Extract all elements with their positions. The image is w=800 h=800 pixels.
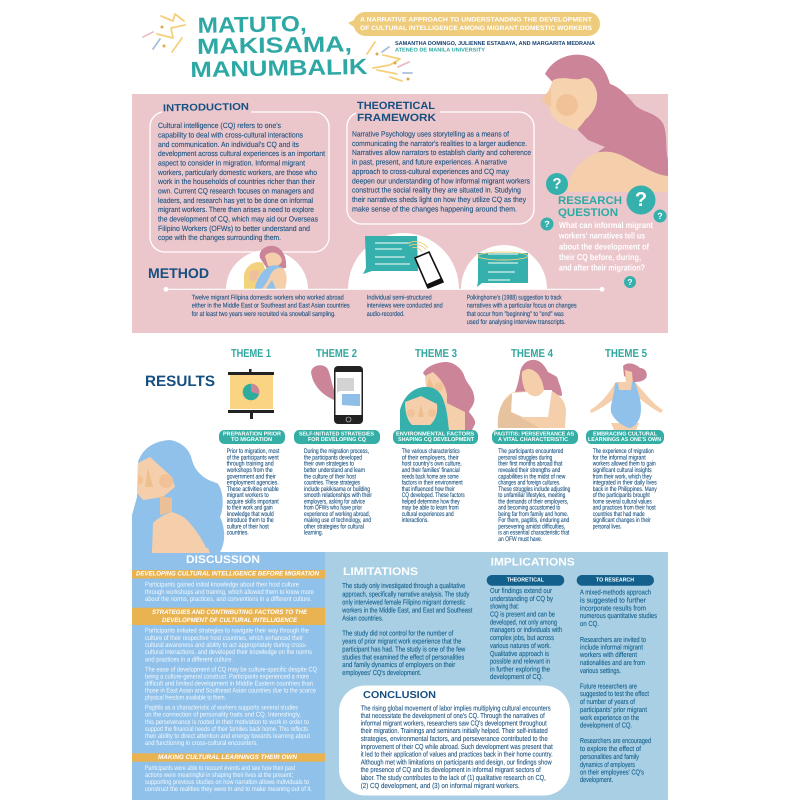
- text: making learnings their own: [145, 765, 312, 793]
- text: theme 4 body: persevering amidst difficulties,: [498, 523, 565, 530]
- text: conclusion body: The rising global movement of labor implies multiplying cultural encounters: [361, 704, 551, 712]
- authors and university: ATENEO DE MANILA UNIVERSITY: [395, 48, 485, 54]
- text: theoretical implications: [490, 586, 562, 681]
- text: strategies: Participants initiated strategies to navigate their way through the: [145, 628, 309, 634]
- text: strategies: being a culture-general construct. Participants experienced a more: [145, 674, 309, 680]
- text: theoretical implications: showing that:: [490, 602, 519, 610]
- label: theme 2 title: SELF-INITIATED STRATEGIES: [299, 431, 374, 437]
- text: theme 3 body: cultural experiences and: [402, 511, 454, 518]
- text: theme 2 body: During the migration process,: [304, 448, 369, 455]
- label: theme 5 title: EMBRACING CULTURAL: [593, 431, 658, 437]
- text: theme 4 body: revealed their strengths and: [498, 467, 561, 474]
- text: limitations body: and family dynamics of employers on their: [342, 660, 456, 669]
- label: theme 3 title: [393, 430, 478, 444]
- text: making learnings their own: supporting previous studies on how narration allows individuals to: [145, 779, 309, 786]
- heading: theoretical framework: FRAMEWORK: [357, 112, 436, 124]
- text: research implications: Researchers are invited to: [580, 635, 646, 644]
- text: limitations body: [342, 581, 472, 677]
- text: conclusion body: (2) CQ development, and (3) on informal migrant workers.: [361, 781, 520, 790]
- text: making learnings their own: Participants were able to recount events and see how their past: [145, 765, 295, 772]
- text: theme 4 body: their first months abroad that: [498, 461, 562, 468]
- text: research implications: suggested to test the effect: [580, 689, 649, 698]
- text: research implications: dynamics of employers: [580, 760, 635, 769]
- text: research implications: participants' prior migrant: [580, 705, 647, 714]
- text: method participants: [192, 294, 350, 318]
- text: theme 5 body: The experience of migration: [593, 448, 654, 455]
- timeline: [164, 287, 604, 292]
- text: theme 2 body: making use of technology, and: [304, 517, 371, 524]
- text: theme 4 body: and becoming accustomed to: [498, 505, 561, 512]
- text: research question: about the development of: [559, 241, 649, 251]
- label: theme 2 title: [294, 430, 380, 444]
- text: introduction body: development across cultural experiences is an important: [158, 149, 326, 158]
- text: making learnings their own: actions were meaningful in shaping their lives at the present;: [145, 772, 293, 779]
- text: method analysis: used for analysing interview transcripts.: [467, 319, 566, 326]
- text: strategies: on the connection of personality traits and CQ. Interestingly,: [145, 712, 301, 718]
- text: method interviews: interviews were conducted and: [367, 302, 443, 310]
- icon: projector screen with pie chart: [228, 369, 274, 419]
- text: before migration: about the norms, practices, and conventions in a different culture.: [145, 596, 312, 603]
- heading: method: METHOD: [148, 265, 209, 281]
- illustration: analysis speech bubble: [461, 245, 547, 289]
- text: theme 1 body: Prior to migration, most: [227, 448, 280, 455]
- illustration: woman with pink hair: [541, 55, 668, 192]
- label: theme 5 title: LEARNINGS AS ONE'S OWN: [588, 437, 661, 443]
- text: theme 1 body: [226, 448, 280, 537]
- panel: conclusion: [339, 686, 570, 796]
- text: limitations body: approach, specifically narrative analysis. The study: [342, 590, 470, 598]
- title: [189, 10, 368, 82]
- illustration: two women: [400, 362, 475, 430]
- text: research implications: A mixed-methods approach: [580, 588, 651, 596]
- text: theme 2 body: their own strategies to: [304, 461, 354, 468]
- subtitle speech bubble: A NARRATIVE APPROACH TO UNDERSTANDING THE DEVELOPMENT: [360, 16, 592, 24]
- text: theme 5 body: countries that had made: [593, 511, 645, 518]
- text: introduction body: cope with the changes surrounding them.: [158, 233, 281, 242]
- label: theme 4 title: PAGTITIS: PERSEVERANCE AS: [494, 431, 574, 437]
- authors and university: [395, 41, 595, 54]
- subheading band: strategies: [132, 608, 325, 625]
- illustration: woman with crossed arms: [498, 360, 566, 428]
- text: theoretical implications: developed, not only among: [490, 618, 557, 626]
- text: limitations body: Asian countries.: [342, 614, 383, 622]
- text: strategies: those in East Asian and Southeast Asian countries due to the scarce: [145, 688, 316, 694]
- text: research implications: development.: [580, 775, 613, 784]
- text: theme 3 body: may be able to learn from: [402, 505, 459, 512]
- illustration: method semicircle with three women: [226, 246, 308, 289]
- illustration: interview speech bubble with phone: [348, 233, 459, 289]
- text: theme 3 body: CQ developed. These factors: [402, 492, 465, 499]
- text: theme 4 body: to unfamiliar lifestyles, meeting: [498, 492, 566, 499]
- text: theme 1 body: employment agencies.: [227, 480, 279, 486]
- label: theme 1 title: TO MIGRATION: [231, 437, 272, 443]
- text: theoretical framework body: communicating the narrator's realities to a larger audience.: [352, 139, 527, 148]
- label: to research: [577, 575, 654, 586]
- text: theme 1 body: to their work and gain: [227, 505, 273, 512]
- text: theme 3 body: needs back home are some: [402, 473, 459, 480]
- text: strategies: their ability to direct attention and energy towards learning about: [145, 733, 310, 740]
- text: theme 2 body: the participants developed: [304, 454, 362, 462]
- heading: theme 3: THEME 3: [415, 348, 457, 360]
- text: theoretical framework body: approach to cross-cultural experiences and CQ may: [352, 167, 509, 176]
- text: theoretical implications: managers or individuals with: [490, 625, 562, 634]
- text: limitations body: workers in the Middle East, and East and Southeast: [342, 606, 472, 614]
- heading: limitations: LIMITATIONS: [343, 566, 418, 578]
- label: theoretical: THEORETICAL: [507, 576, 544, 583]
- text: strategies: cultural interactions, and developed their knowledge on the norms: [145, 649, 312, 656]
- label: theoretical: [487, 575, 564, 586]
- subtitle speech bubble: [348, 12, 600, 36]
- title: MAKISAMA,: [197, 31, 352, 59]
- text: research question: and after their migration?: [559, 262, 645, 272]
- text: conclusion body: strategies, environmental factors, and perseverance contributed to the: [361, 734, 548, 743]
- confetti left: [143, 14, 185, 52]
- label: to research: TO RESEARCH: [596, 576, 634, 583]
- panel: discussion: [132, 548, 325, 800]
- text: theme 2 body: include pakikisama or building: [304, 486, 370, 493]
- text: theme 5 body: significant cultural insights: [593, 467, 652, 474]
- text: theme 2 body: other strategies for cultural: [304, 523, 364, 530]
- text: theme 5 body: personal lives.: [593, 523, 622, 530]
- text: theme 5 body: from their work, which they: [593, 473, 652, 480]
- text: theme 5 body: of the participants brought: [593, 492, 650, 499]
- text: theoretical implications: Our findings extend our: [490, 586, 552, 595]
- text: theme 1 body: through training and: [227, 461, 274, 468]
- text: research implications: numerous quantitative studies: [580, 611, 657, 620]
- theme 2 column: [294, 348, 380, 537]
- text: theoretical implications: possible and relevant in: [490, 656, 550, 666]
- text: theoretical framework body: in past, present, and future experiences. A narrative: [352, 158, 507, 167]
- text: limitations body: studies that examined the effect of personalities: [342, 652, 465, 662]
- icon: question mark circles: ?: [627, 277, 633, 287]
- text: theme 3 body: host country's own culture,: [402, 461, 462, 468]
- panel: limitations: [342, 566, 472, 677]
- text: introduction body: capability to deal with cross-cultural interactions: [158, 130, 303, 140]
- text: theme 5 body: significant changes in their: [593, 517, 651, 524]
- heading: research question: RESEARCH: [558, 195, 622, 207]
- text: theme 2 body: learning.: [304, 530, 323, 537]
- text: theme 3 body: and their families' financial: [402, 467, 460, 474]
- illustration: blue-haired woman: [132, 440, 224, 552]
- text: theoretical implications: understanding of CQ by: [490, 594, 553, 603]
- text: conclusion body: that necessitate the development of one's CQ. Through the narratives of: [361, 711, 545, 720]
- text: theme 1 body: acquire skills important: [227, 498, 279, 505]
- text: before migration: through workshops and training, which allowed them to know more: [145, 589, 314, 596]
- icon: question mark circles: ?: [657, 211, 663, 221]
- text: theme 4 body: The participants encountered: [498, 448, 564, 455]
- subheading band: before migration: DEVELOPING CULTURAL INTELLIGENCE BEFORE MIGRATION: [136, 571, 319, 578]
- text: method analysis: that occur from "beginning" to "end" was: [467, 311, 564, 318]
- panel: theoretical framework: [347, 100, 534, 224]
- panel: pink background: [132, 94, 668, 333]
- text: method analysis: [467, 294, 577, 326]
- confetti right: [367, 42, 412, 81]
- text: theoretical implications: various natures of work.: [490, 641, 551, 650]
- text: strategies: support the financial needs of their families back home. This reflects: [145, 726, 308, 733]
- label: theme 4 title: [492, 430, 578, 444]
- text: theme 3 body: The various characteristics: [402, 448, 460, 455]
- text: introduction body: and communication. An individual's CQ and its: [158, 140, 299, 149]
- heading: discussion: DISCUSSION: [186, 554, 260, 566]
- text: method interviews: Individual semi-structured: [367, 294, 432, 302]
- text: research implications: [579, 588, 657, 784]
- text: strategies: and practices in a different culture.: [145, 656, 233, 664]
- text: research implications: various settings.: [580, 666, 621, 675]
- panel: limitations, implications, conclusion background: [325, 552, 668, 800]
- heading: research question: [558, 195, 622, 219]
- text: conclusion body: Although met with limitations on participants and design, our findings show: [361, 758, 552, 766]
- text: limitations body: participant has had. The study is one of the few: [342, 644, 466, 654]
- heading: conclusion: CONCLUSION: [363, 690, 436, 701]
- text: theme 2 body: experience of working abroad,: [304, 511, 370, 518]
- theme 4 column: [492, 348, 578, 543]
- text: introduction body: workers, particularly domestic workers, are those who: [157, 168, 317, 177]
- text: theoretical implications: development of CQ.: [490, 672, 543, 681]
- text: introduction body: [157, 121, 326, 242]
- text: theme 4 body: capabilities in the midst of new: [498, 473, 565, 480]
- text: theme 3 body: factors in their environment: [402, 480, 463, 486]
- text: strategies: and functioning in cross-cultural encounters.: [145, 740, 258, 747]
- text: theme 5 body: back in the Philippines. Many: [593, 486, 657, 493]
- text: research implications: incorporate results from: [580, 604, 646, 612]
- text: introduction body: aspect to consider in migration. Informal migrant: [158, 158, 306, 168]
- panel: research question: [540, 173, 666, 288]
- theme 1 column: [219, 348, 285, 537]
- text: strategies: Pagtitis as a characteristic of workers supports several studies: [145, 704, 298, 712]
- text: theme 4 body: These struggles include adjusting: [498, 486, 571, 493]
- text: method participants: either in the Middle East or Southeast and East Asian countries: [192, 302, 350, 310]
- text: limitations body: employees' CQ's development.: [342, 668, 421, 677]
- text: theme 3 body: interactions.: [402, 517, 429, 524]
- text: theme 4 body: an OFW must have.: [498, 536, 542, 543]
- text: theme 1 body: workshops from the: [226, 467, 273, 474]
- text: theme 2 body: countries. These strategies: [304, 480, 360, 486]
- text: theme 3 body: [402, 448, 465, 524]
- icon: question mark circles: ?: [552, 176, 562, 192]
- heading: introduction: INTRODUCTION: [163, 102, 249, 114]
- text: theme 3 body: helped determine how they: [402, 498, 460, 505]
- text: limitations body: years of prior migrant work experience that the: [342, 636, 461, 646]
- text: research implications: is suggested to further: [580, 596, 647, 604]
- text: research question: their CQ before, during,: [559, 252, 641, 262]
- heading: theme 4: THEME 4: [511, 348, 554, 360]
- text: theoretical implications: CQ is present and can be: [490, 610, 555, 618]
- text: theoretical framework body: deepen our understanding of how informal migrant workers: [352, 176, 530, 185]
- text: theme 4 body: personal struggles during: [498, 454, 553, 462]
- text: theme 4 body: is an essential characteristic that: [498, 530, 569, 537]
- text: theme 1 body: migrant workers to: [227, 492, 269, 499]
- text: introduction body: work in the households of countries richer than their: [157, 177, 315, 186]
- icon: question mark circles: ?: [544, 219, 550, 229]
- text: making learnings their own: construct the realities they were in and to make meaning out of it.: [145, 786, 312, 793]
- text: limitations body: The study did not control for the number of: [342, 628, 453, 638]
- text: research question: workers' narratives tell us: [558, 231, 645, 241]
- heading: implications: IMPLICATIONS: [491, 557, 575, 569]
- text: introduction body: migrant workers. There then arises a need to explore: [158, 205, 314, 214]
- icon: question mark circles: ?: [635, 189, 647, 211]
- text: theme 1 body: knowledge that would: [227, 511, 274, 518]
- text: theme 2 body: better understand and learn: [304, 467, 365, 474]
- theme 3 column: [393, 348, 478, 524]
- text: introduction body: Filipino Workers (OFWs) to better understand and: [158, 224, 310, 233]
- heading: theme 1: THEME 1: [231, 348, 271, 360]
- text: research implications: of number of years of: [580, 697, 635, 706]
- subheading band: strategies: STRATEGIES AND CONTRIBUTING FACTORS TO THE: [152, 609, 308, 616]
- text: theoretical framework body: their narratives sheds light on how they utilize CQ as they: [352, 195, 526, 204]
- text: theme 4 body: the demands of their employers,: [498, 498, 568, 505]
- text: method participants: Twelve migrant Filipina domestic workers who worked abroad: [192, 294, 344, 302]
- panel: introduction: [150, 102, 329, 252]
- text: theme 4 body: [498, 448, 571, 543]
- illustration: woman in blue dress: [590, 363, 663, 430]
- text: research implications: to explore the effect of: [580, 744, 641, 753]
- text: theoretical implications: in further exploring the: [490, 664, 550, 674]
- text: strategies: difficult and limited development in Middle Eastern countries than: [145, 680, 313, 688]
- heading: theoretical framework: THEORETICAL: [357, 100, 436, 112]
- text: theoretical framework body: make sense of the changes happening around them.: [352, 204, 517, 214]
- text: method analysis: Polkinghorne's (1988) suggestion to track: [467, 294, 562, 302]
- text: theme 2 body: [304, 448, 373, 537]
- text: theme 5 body: workers allowed them to gain: [592, 461, 656, 468]
- subheading band: strategies: DEVELOPMENT OF CULTURAL INTELLIGENCE: [162, 617, 298, 624]
- text: research implications: development of CQ.: [580, 720, 632, 730]
- text: research implications: personalities and family: [580, 752, 639, 761]
- text: research implications: Future researchers are: [580, 682, 637, 690]
- text: theme 1 body: of the participants went: [227, 454, 279, 462]
- text: theme 5 body: [592, 448, 657, 530]
- text: introduction body: leaders, and research has yet to be done on informal: [158, 196, 313, 205]
- subtitle speech bubble: OF CULTURAL INTELLIGENCE AMONG MIGRANT DOMESTIC WORKERS: [360, 25, 593, 32]
- heading: theme 2: THEME 2: [316, 348, 357, 360]
- subheading band: making learnings their own: [132, 753, 325, 762]
- text: research implications: on CQ.: [580, 619, 599, 628]
- text: introduction body: Cultural intelligence (CQ) refers to one's: [158, 121, 281, 130]
- text: theme 4 body: being far from family and home.: [498, 511, 568, 518]
- text: method interviews: [367, 294, 443, 318]
- label: theme 3 title: ENVIRONMENTAL FACTORS: [396, 431, 474, 437]
- text: theoretical framework body: construct the social reality they are situated in. Studying: [352, 186, 521, 195]
- text: theoretical implications: complex jobs, but across: [490, 633, 554, 642]
- text: introduction body: own. Current CQ research focuses on managers and: [158, 186, 314, 196]
- text: theme 5 body: and practices from their host: [593, 505, 656, 512]
- text: research implications: include informal migrant: [580, 642, 643, 652]
- text: strategies: physical freedom available to them.: [145, 694, 226, 702]
- label: theme 1 title: PREPARATION PRIOR: [223, 431, 281, 437]
- text: theme 2 body: employers, asking for advice: [304, 498, 365, 505]
- text: theoretical framework body: [352, 130, 531, 214]
- text: theme 2 body: smooth relationships with their: [304, 492, 373, 499]
- text: theme 3 body: that influenced how their: [402, 486, 455, 493]
- text: research implications: work experience on the: [579, 713, 639, 722]
- authors and university: SAMANTHA DOMINGO, JULIENNE ESTABAYA, AND MARGARITA MEDRANA: [395, 41, 595, 47]
- text: theoretical framework body: Narratives allow narrators to establish clarity and coherence: [352, 148, 531, 157]
- subheading band: making learnings their own: MAKING CULTURAL LEARNINGS THEIR OWN: [158, 754, 297, 761]
- text: theme 1 body: These activities enable: [227, 486, 279, 493]
- text: theme 5 body: home several cultural values: [593, 498, 652, 505]
- text: before migration: Participants gained initial knowledge about their host culture: [145, 582, 299, 588]
- text: limitations body: The study only investigated through a qualitative: [342, 581, 465, 590]
- heading: theme 5: THEME 5: [605, 348, 648, 360]
- text: theme 5 body: integrated in their daily lives: [593, 480, 657, 486]
- label: theme 5 title: [586, 430, 664, 444]
- text: theoretical framework body: Narrative Psychology uses storytelling as a means of: [352, 130, 510, 138]
- icon: question mark circles: [540, 173, 666, 288]
- icon: smartphone with speech bubble: [311, 365, 363, 424]
- text: research question: [558, 220, 653, 272]
- text: method interviews: audio-recorded.: [367, 311, 405, 318]
- text: conclusion body: [361, 704, 553, 790]
- text: research implications: Researchers are encouraged: [580, 736, 651, 745]
- text: theme 1 body: introduce them to the: [227, 517, 274, 524]
- theme 5 column: [586, 348, 664, 530]
- text: limitations body: only interviewed female Filipino migrant domestic: [342, 598, 466, 606]
- panel: implications: [487, 557, 657, 784]
- text: strategies: this perseverance is rooted in their motivation to work in order to: [145, 719, 309, 726]
- label: theme 2 title: FOR DEVELOPING CQ: [308, 437, 367, 443]
- text: strategies: cultural awareness and ability to act appropriately during cross-: [145, 642, 307, 649]
- heading: research question: QUESTION: [558, 207, 618, 219]
- title: MATUTO,: [197, 11, 307, 38]
- label: theme 4 title: A VITAL CHARACTERISTIC: [498, 437, 568, 443]
- label: theme 3 title: SHAPING CQ DEVELOPMENT: [398, 437, 475, 443]
- text: conclusion body: their migration. Trainings and seminars initially helped. Their self-initiated: [361, 726, 548, 735]
- title: MANUMBALIK: [190, 54, 368, 82]
- text: theme 1 body: government and their: [227, 473, 276, 480]
- text: conclusion body: informal migrant workers, researchers saw CQ's development throughout: [361, 718, 547, 728]
- text: introduction body: the development of CQ, which may aid our Overseas: [158, 214, 318, 224]
- label: theme 1 title: [219, 430, 285, 444]
- text: conclusion body: it led to their application of values and practices back in their home country.: [361, 750, 553, 758]
- text: before migration: [145, 582, 314, 603]
- text: research implications: workers with different: [579, 650, 637, 659]
- text: research implications: nationalities and are from: [580, 658, 645, 667]
- text: method participants: for at least two years were recruited via snowball sampling.: [192, 311, 336, 318]
- text: research implications: on their employees' CQ's: [580, 768, 644, 776]
- heading: results: RESULTS: [145, 373, 215, 390]
- text: theme 4 body: For them, pagtitis, enduring and: [498, 517, 570, 524]
- text: strategies: culture of their respective host countries, which enhanced their: [145, 635, 304, 642]
- text: theme 2 body: from OFWs who have prior: [304, 505, 363, 512]
- text: conclusion body: labor. The study contributes to the lack of (1) qualitative research on CQ,: [361, 773, 546, 782]
- text: theme 2 body: the culture of their host: [304, 473, 356, 480]
- text: method analysis: narratives with a particular focus on changes: [467, 302, 577, 310]
- text: theme 1 body: culture of their host: [227, 523, 269, 530]
- text: theme 1 body: countries.: [227, 530, 249, 537]
- text: theme 4 body: changes and foreign cultures.: [498, 480, 560, 486]
- text: theoretical implications: Qualitative approach is: [490, 649, 549, 658]
- text: research question: What can informal migrant: [559, 220, 653, 230]
- text: conclusion body: the presence of CQ and its development in informal migrant sectors of: [361, 765, 541, 774]
- text: strategies: The ease of development of CQ may be culture-specific despite CQ: [145, 666, 317, 674]
- text: conclusion body: improvement of their CQ while abroad. Such development was present that: [361, 742, 553, 751]
- heading: theoretical framework: [357, 100, 436, 124]
- text: theme 5 body: for the informal migrant: [593, 454, 646, 462]
- text: theme 3 body: of their employers, their: [402, 454, 459, 462]
- text: strategies: [145, 628, 317, 747]
